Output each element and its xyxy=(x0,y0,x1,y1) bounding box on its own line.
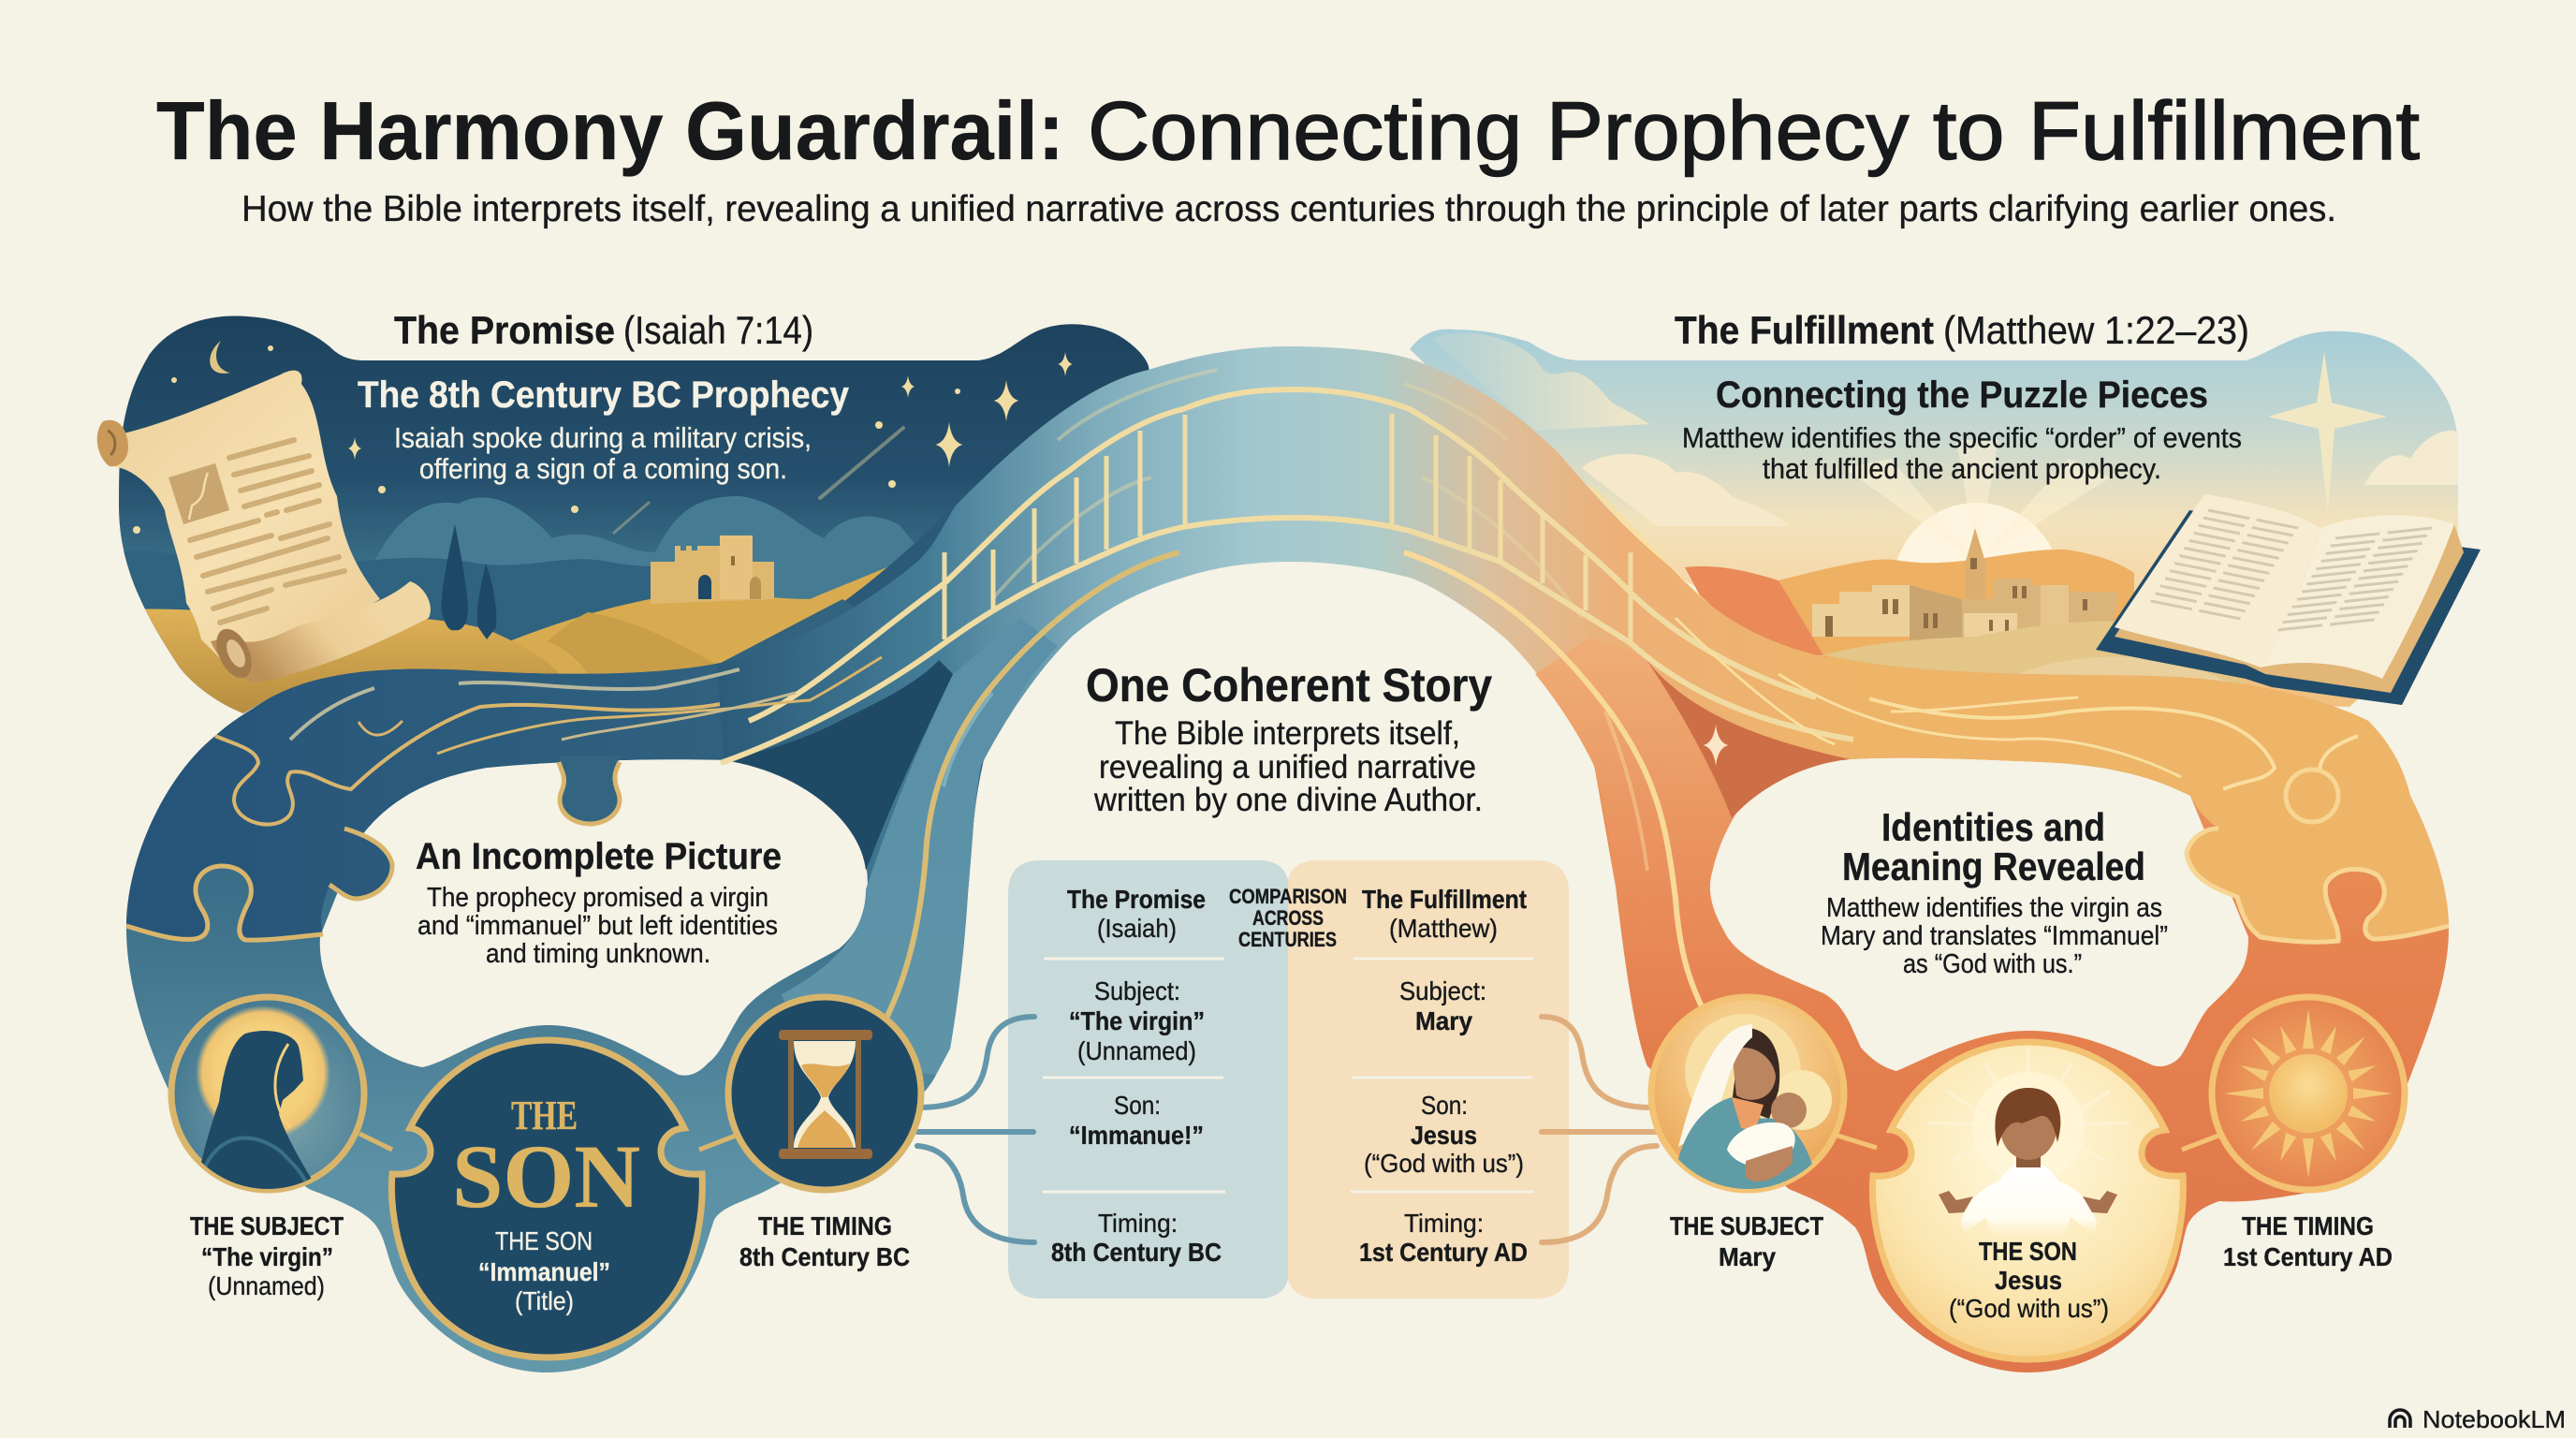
icon: shooting stars xyxy=(614,428,903,533)
right wedge with star xyxy=(1645,657,1850,818)
label: the son, fulfillment: (“God with us”) xyxy=(1949,1294,2109,1323)
text block: identities and meaning revealed: Mary and translates “Immanuel” xyxy=(1821,921,2168,951)
table column: the promise: The Promise xyxy=(1067,885,1206,914)
text block: an incomplete picture: The prophecy promised a virgin xyxy=(427,883,768,913)
text block: 8th century prophecy xyxy=(358,374,850,485)
label: the son, fulfillment xyxy=(1949,1237,2109,1323)
seal text: the son: THE SON xyxy=(495,1226,593,1255)
connectors: table to Mary xyxy=(1542,1017,1657,1242)
right leg of arch xyxy=(1535,637,1850,1066)
icon: clouds xyxy=(1432,333,2458,526)
title xyxy=(156,84,2420,177)
bridge rails and posts xyxy=(721,389,1853,1039)
bridge arch xyxy=(290,346,2181,1075)
table column: the promise: (Unnamed) xyxy=(1077,1036,1196,1065)
table column: the promise: “The virgin” xyxy=(1069,1006,1205,1035)
logo: NotebookLM: NotebookLM xyxy=(2422,1405,2566,1433)
text block: 8th century prophecy: offering a sign of a coming son. xyxy=(419,452,787,485)
text block: an incomplete picture: and “immanuel” but left identities xyxy=(417,911,778,941)
left leg of arch xyxy=(782,618,1058,1075)
icon: moon xyxy=(210,341,230,374)
text block: identities and meaning revealed: as “God with us.” xyxy=(1903,949,2082,979)
table column: the promise: Subject: xyxy=(1094,976,1180,1005)
title: Connecting Prophecy to Fulfillment xyxy=(1088,84,2420,177)
icon: hills xyxy=(1685,550,2134,674)
icon: scroll xyxy=(97,371,431,683)
label: the timing, promise: THE TIMING xyxy=(758,1211,892,1240)
label: the son, fulfillment: THE SON xyxy=(1979,1237,2077,1266)
label: the timing, fulfillment: THE TIMING xyxy=(2242,1211,2374,1240)
label: the subject, promise xyxy=(190,1211,344,1300)
text block: identities and meaning revealed: Matthew identifies the virgin as xyxy=(1826,893,2162,923)
puzzle piece and river, orange xyxy=(1591,487,2449,942)
icon: city xyxy=(1812,528,2118,655)
heading: the promise xyxy=(394,308,813,352)
puzzle tab xyxy=(559,756,620,824)
icon: castle xyxy=(651,536,774,604)
seal text: the son xyxy=(452,1093,640,1315)
text block: one coherent story xyxy=(1086,659,1492,818)
text block: connecting the puzzle pieces: Connecting the Puzzle Pieces xyxy=(1716,374,2208,416)
table column: the fulfillment: Subject: xyxy=(1399,976,1486,1005)
panel: night sky promise scene xyxy=(119,316,1149,713)
back hill xyxy=(511,566,888,674)
icon: open book xyxy=(2096,494,2481,705)
table column: the fulfillment: Jesus xyxy=(1411,1121,1477,1150)
label: the timing, fulfillment xyxy=(2223,1211,2393,1271)
text block: 8th century prophecy: The 8th Century BC Prophecy xyxy=(358,374,850,416)
label: the subject, promise: (Unnamed) xyxy=(208,1271,325,1300)
text block: identities and meaning revealed: Identities and xyxy=(1881,805,2105,849)
front hill xyxy=(145,609,559,713)
panel: comparison table, promise side xyxy=(1008,860,1288,1299)
table column: the promise: “Immanue!” xyxy=(1069,1121,1204,1150)
table column: the promise: Timing: xyxy=(1098,1209,1178,1238)
table column: the fulfillment: Son: xyxy=(1421,1091,1468,1120)
icon: son seal xyxy=(391,1040,736,1357)
connectors: hourglass to table xyxy=(917,1017,1034,1242)
label: the subject, fulfillment xyxy=(1670,1211,1823,1271)
icon: cypress trees xyxy=(442,524,496,639)
label: the subject, fulfillment: THE SUBJECT xyxy=(1670,1211,1823,1240)
table column: the fulfillment: 1st Century AD xyxy=(1359,1238,1528,1267)
text block: 8th century prophecy: Isaiah spoke during a military crisis, xyxy=(394,421,812,454)
table center label: comparison across centuries: ACROSS xyxy=(1252,906,1324,930)
seal text: the son: (Title) xyxy=(515,1286,574,1315)
puzzle piece and river, blue xyxy=(126,589,945,940)
label: the timing, fulfillment: 1st Century AD xyxy=(2223,1242,2393,1271)
label: the timing, promise: 8th Century BC xyxy=(739,1242,910,1271)
heading: the promise: (Isaiah 7:14) xyxy=(623,308,813,352)
text block: one coherent story: revealing a unified narrative xyxy=(1099,749,1476,785)
text block: connecting the puzzle pieces xyxy=(1682,374,2242,485)
panel: orange ring identities revealed xyxy=(1591,487,2449,1372)
table column: the promise: 8th Century BC xyxy=(1051,1238,1222,1267)
table column: the fulfillment xyxy=(1359,885,1528,1267)
text block: an incomplete picture: An Incomplete Picture xyxy=(416,836,782,877)
table column: the fulfillment: (Matthew) xyxy=(1389,914,1498,943)
subtitle: How the Bible interprets itself, revealing a unified narrative across centuries through the principle of later parts clarifying earlier ones. xyxy=(242,189,2336,229)
label: the son, fulfillment: Jesus xyxy=(1995,1266,2062,1295)
heading: the promise: The Promise xyxy=(394,308,615,352)
text block: an incomplete picture xyxy=(416,836,782,969)
text block: one coherent story: written by one divine Author. xyxy=(1093,782,1483,818)
title: The Harmony Guardrail: xyxy=(156,84,1064,177)
table column: the promise: Son: xyxy=(1114,1091,1161,1120)
heading: the fulfillment: (Matthew 1:22–23) xyxy=(1943,308,2249,352)
icon: sun glow xyxy=(1893,503,2061,671)
text block: identities and meaning revealed: Meaning Revealed xyxy=(1842,844,2145,888)
table center label: comparison across centuries: COMPARISON xyxy=(1229,885,1347,908)
icon: Mary and child xyxy=(1651,997,1877,1198)
seal text: the son: “Immanuel” xyxy=(478,1257,610,1286)
left wedge xyxy=(724,660,953,871)
panel: comparison table, fulfillment side xyxy=(1288,860,1569,1299)
icon: veiled subject xyxy=(171,997,392,1208)
icon: son figure xyxy=(1872,1042,2218,1359)
text block: connecting the puzzle pieces: Matthew identifies the specific “order” of events xyxy=(1682,421,2242,454)
seal text: the son: THE xyxy=(511,1093,578,1138)
label: the timing, promise xyxy=(739,1211,910,1271)
table column: the fulfillment: (“God with us”) xyxy=(1364,1149,1524,1178)
bridge swoosh highlights xyxy=(944,370,1647,871)
middle hill shade xyxy=(549,612,715,674)
table column: the promise: (Isaiah) xyxy=(1097,914,1177,943)
text block: an incomplete picture: and timing unknown. xyxy=(486,939,710,969)
table center label: comparison across centuries xyxy=(1229,885,1347,951)
label: the subject, promise: “The virgin” xyxy=(201,1242,333,1271)
table column: the promise xyxy=(1051,885,1222,1267)
table column: the fulfillment: Mary xyxy=(1415,1006,1472,1035)
label: the subject, promise: THE SUBJECT xyxy=(190,1211,344,1240)
icon: hourglass xyxy=(728,997,921,1190)
table dividers xyxy=(1043,959,1534,1192)
text block: identities and meaning revealed xyxy=(1821,805,2168,979)
table column: the fulfillment: The Fulfillment xyxy=(1362,885,1527,914)
label: the subject, fulfillment: Mary xyxy=(1719,1242,1776,1271)
table column: the fulfillment: Timing: xyxy=(1404,1209,1484,1238)
panel: blue ring incomplete picture xyxy=(126,487,1048,1372)
panel: dawn sky fulfillment scene xyxy=(1410,330,2458,707)
text block: one coherent story: The Bible interprets itself, xyxy=(1115,715,1460,752)
text block: connecting the puzzle pieces: that fulfilled the ancient prophecy. xyxy=(1763,452,2161,485)
heading: the fulfillment: The Fulfillment xyxy=(1675,308,1934,352)
icon: north star xyxy=(2268,352,2387,514)
text block: one coherent story: One Coherent Story xyxy=(1086,659,1492,712)
icon: stars xyxy=(133,345,1073,534)
icon: sun xyxy=(2212,997,2405,1190)
heading: the fulfillment xyxy=(1675,308,2249,352)
seal text: the son: SON xyxy=(452,1126,640,1226)
table center label: comparison across centuries: CENTURIES xyxy=(1238,928,1337,951)
river strands xyxy=(290,657,882,754)
